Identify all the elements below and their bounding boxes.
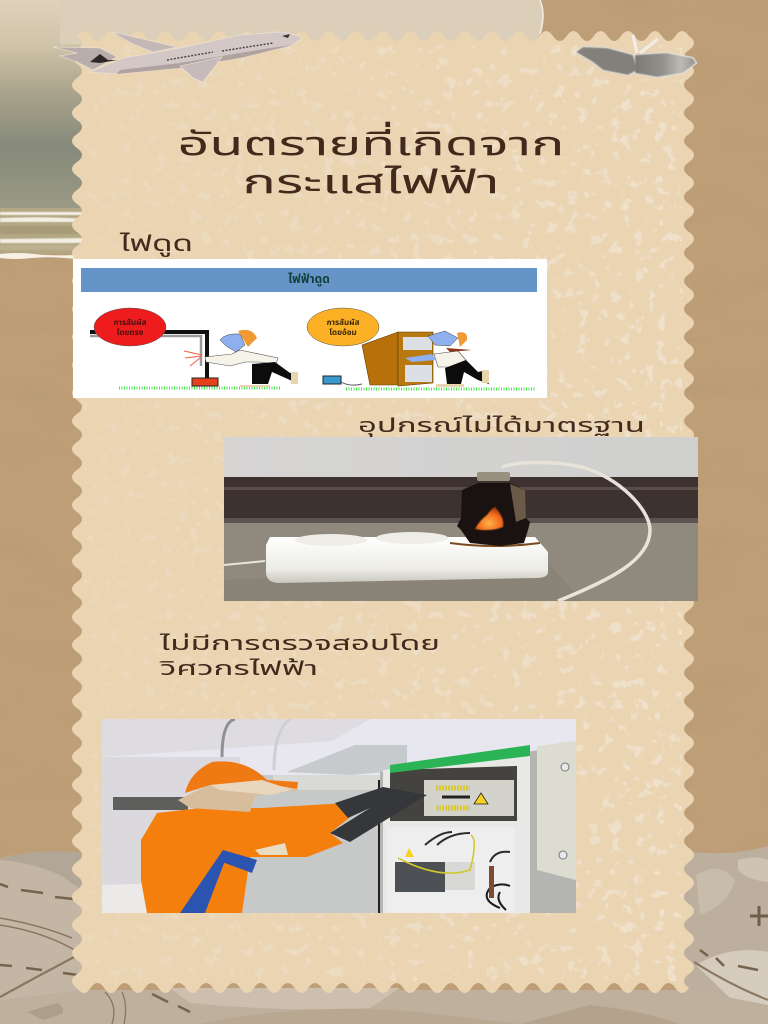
panel interior: [379, 745, 576, 913]
heading: no inspection by electrical engineer: [158, 632, 440, 680]
icon: moth: [576, 35, 696, 77]
open cabinet door: [240, 775, 380, 913]
background: sea and sky photo: [0, 0, 90, 259]
photo: electrician at switchboard: [102, 719, 576, 913]
title: กระแสไฟฟ้า: [242, 163, 500, 200]
orange badge: โดยอ้อม: [329, 327, 357, 337]
photo: burning plug on power strip: [224, 437, 698, 601]
burnt plug: [457, 472, 530, 546]
background: map at bottom: [0, 846, 768, 1024]
panel: scalloped parchment paper: [72, 31, 694, 993]
background: torn beige paper strip: [60, 0, 543, 44]
icon: airplane: [53, 32, 302, 82]
right door: [537, 741, 576, 880]
ground lines: [119, 388, 535, 389]
direct contact pipe: [90, 332, 218, 386]
worker: [141, 761, 427, 913]
red badge: การสัมผัส: [114, 317, 147, 327]
power cord: [224, 561, 265, 565]
heading: electric shock: ไฟดูด: [118, 231, 193, 257]
green trunking: [390, 745, 530, 773]
heading: no inspection by electrical engineer: ไม่มีการตรวจสอบโดย: [158, 632, 440, 655]
banner: [81, 268, 537, 292]
heading: substandard equipment: อุปกรณ์ไม่ได้มาตรฐาน: [358, 414, 645, 437]
heading: no inspection by electrical engineer: วิศวกรไฟฟ้า: [158, 658, 318, 680]
title: [178, 121, 564, 200]
man receiving indirect shock: [405, 331, 489, 387]
white cable: [502, 462, 650, 601]
banner: ไฟฟ้าดูด: [288, 272, 330, 287]
red badge: [94, 308, 166, 346]
man receiving direct shock: [205, 330, 298, 387]
red badge: โดยตรง: [117, 328, 144, 337]
orange badge: การสัมผัส: [327, 317, 360, 327]
cabinet: [323, 332, 433, 386]
power strip: [266, 532, 548, 583]
orange badge: [307, 308, 379, 346]
title: อันตรายที่เกิดจาก: [178, 121, 564, 162]
panel: electric shock illustration: [73, 259, 547, 398]
